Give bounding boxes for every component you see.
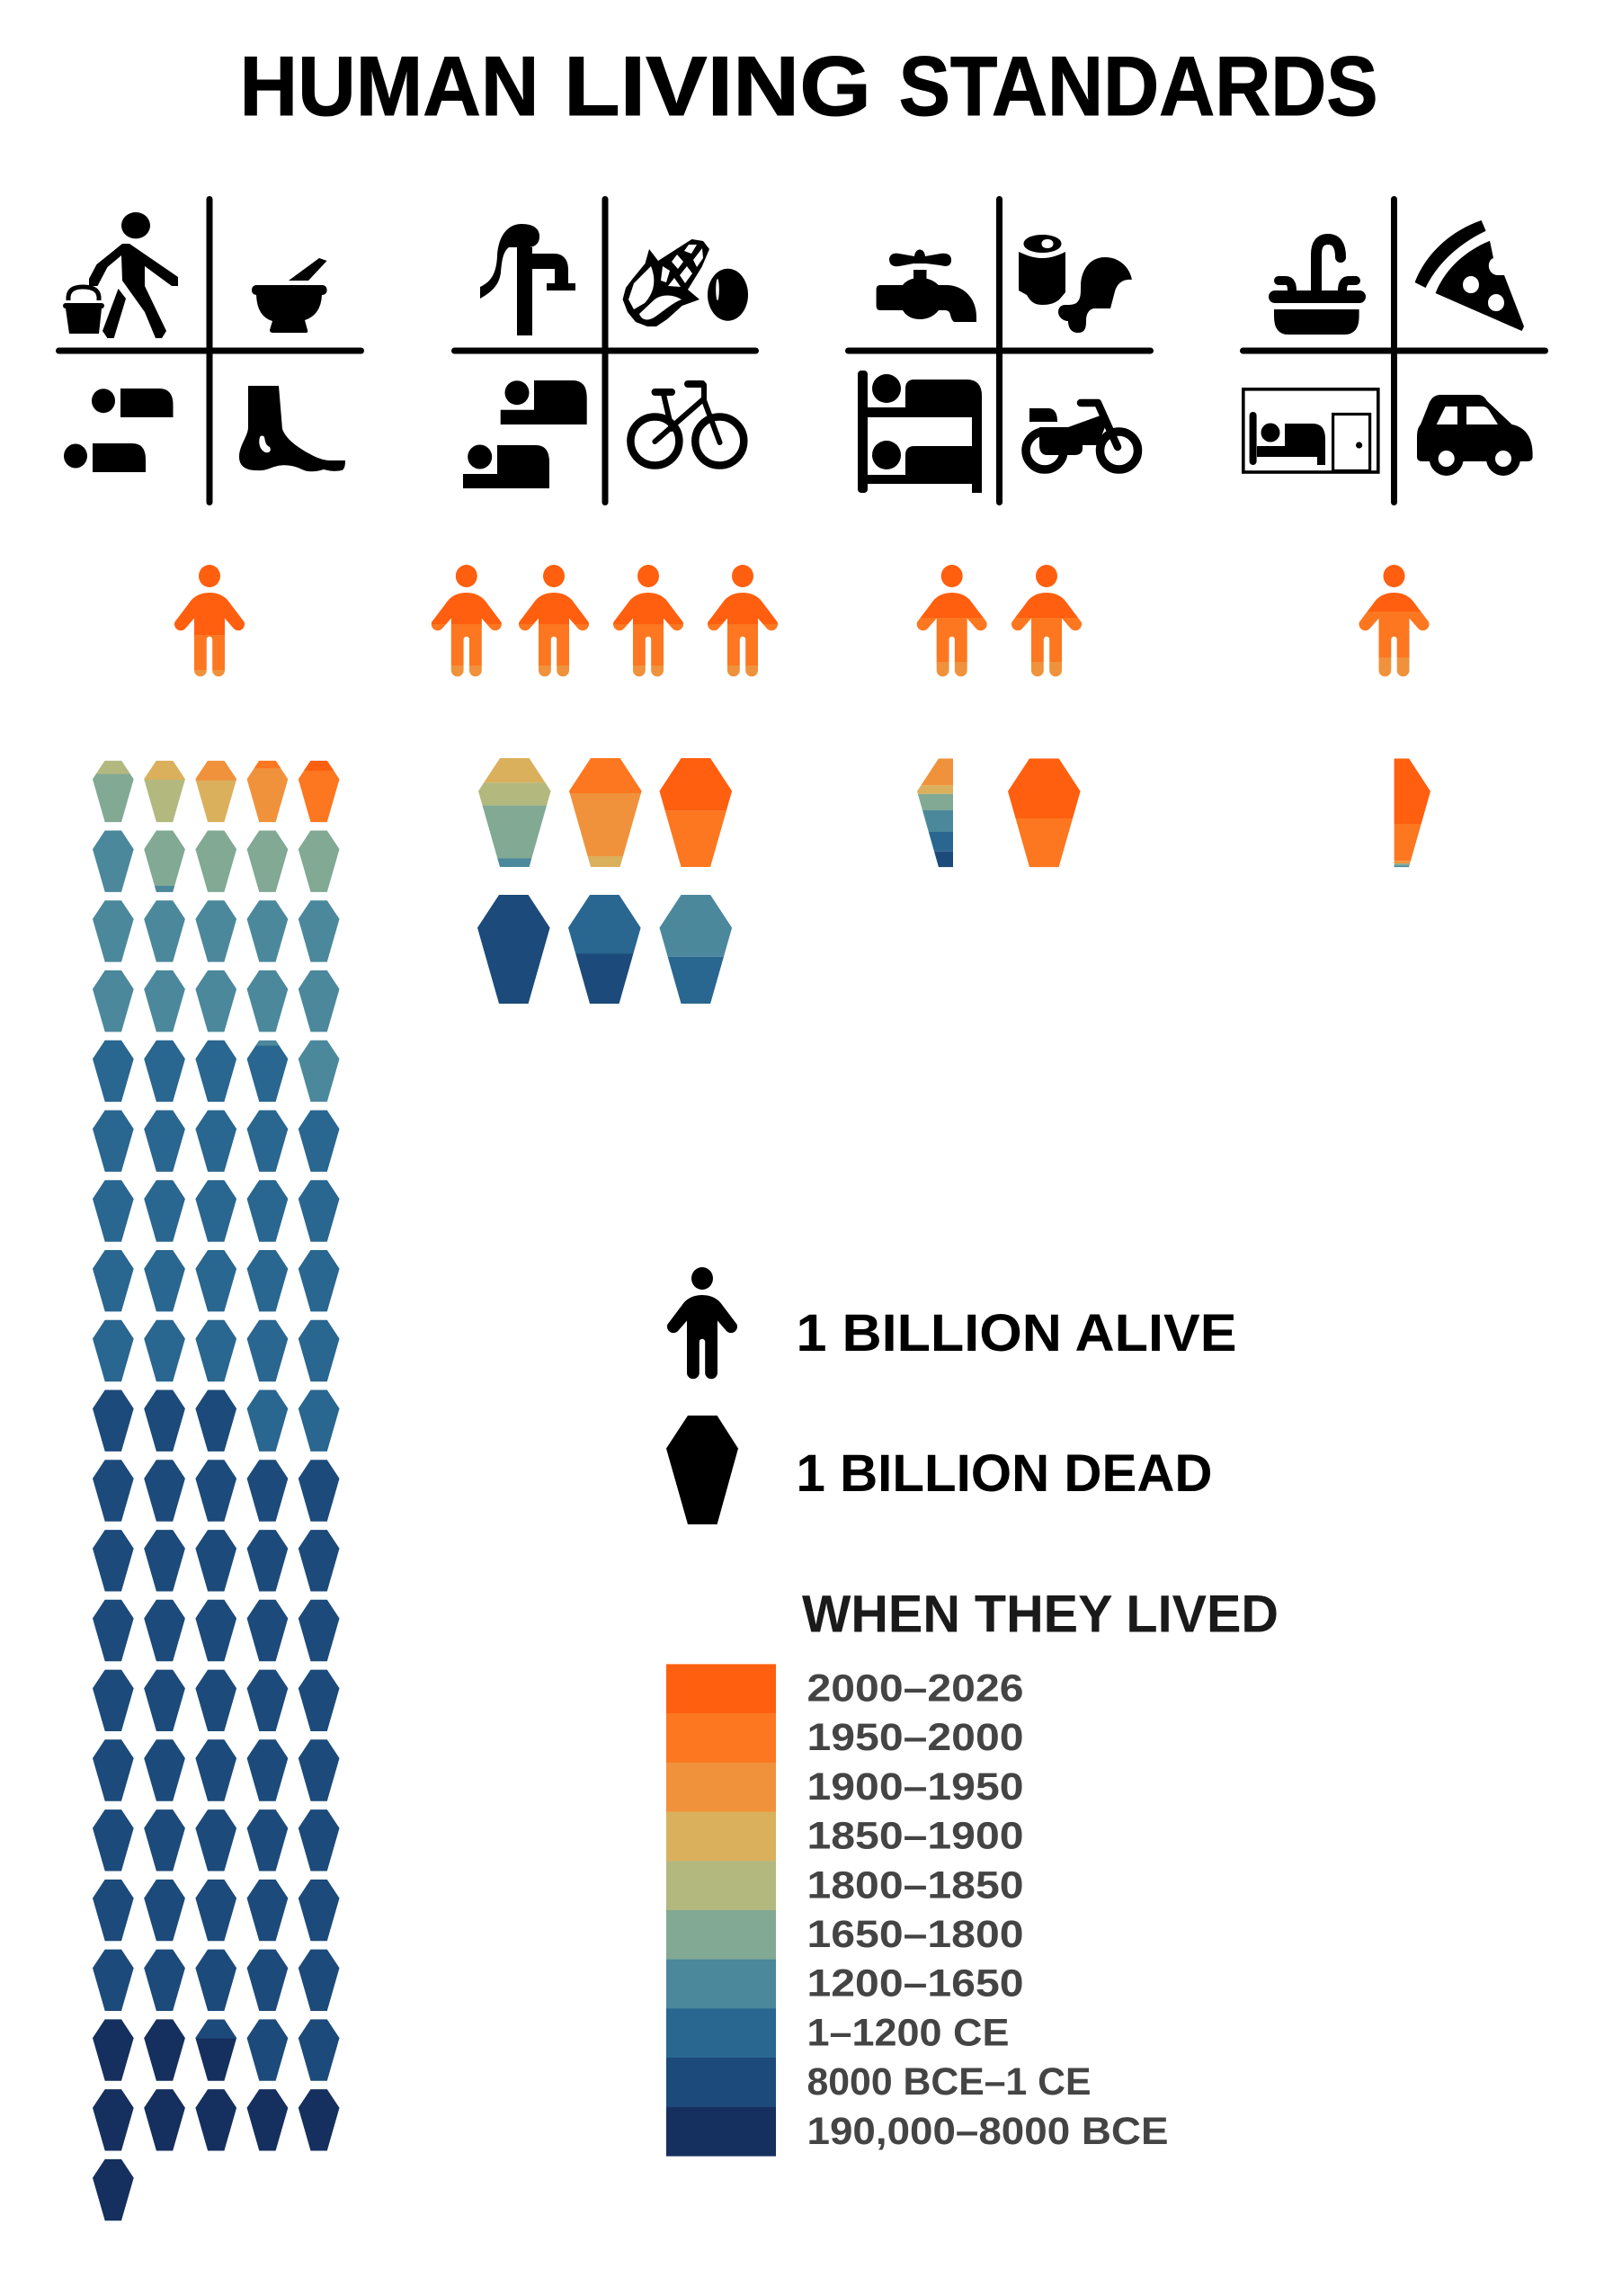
coffin row 16 [93,1809,340,1871]
legend: 1 billion alive [667,1267,1237,1379]
icon: car [1417,395,1533,476]
coffin row 19 [93,2019,340,2081]
title [239,39,1378,133]
coffin row 3 [93,900,340,962]
coffin row 8 [93,1250,340,1311]
coffin row 18 [93,1950,340,2011]
icon: black coffin [666,1416,738,1524]
icon: hand water pump [480,224,575,335]
partial coffin [917,758,953,868]
era labels: 1900–1950 [807,1765,1023,1809]
people alive: group 1 [174,565,245,676]
coffin row 4 [93,970,340,1032]
title: STANDARDS [899,39,1378,133]
icon: corn and egg [623,239,748,326]
icon: pizza slice [1415,220,1524,331]
colour bands [666,1664,776,2157]
legend: 1 billion dead [666,1416,1212,1524]
icon: sink with running tap [1269,239,1366,335]
era labels: 1950–2000 [807,1716,1023,1759]
legend heading: WHEN THEY LIVED [802,1586,1279,1644]
era labels: 1650–1800 [807,1913,1023,1956]
icon: bunk bed with two people [858,371,982,493]
icon: two people sleeping with larger beds [463,380,587,488]
full coffin [1008,758,1081,868]
coffin row 11 [93,1460,340,1522]
title: LIVING [564,39,871,133]
people dead: group 2 coffins [477,758,732,1005]
icon: black person [667,1267,737,1379]
icon: person walking with bucket [63,212,178,338]
era labels [807,1667,1169,2153]
coffin row 1 [93,761,340,823]
label: 1 BILLION ALIVE [797,1304,1237,1362]
coffin row 15 [93,1739,340,1801]
era labels: 2000–2026 [807,1667,1023,1711]
era labels: 1800–1850 [807,1863,1023,1907]
coffin row 7 [93,1180,340,1242]
coffin row 21 [93,2159,134,2220]
coffin row 5 [93,1041,340,1103]
icon: mortar and pestle [252,258,327,333]
people dead: group 3 coffins [917,758,1081,868]
icon: toilet roll and chicken leg [1019,235,1132,333]
era labels: 8000 BCE–1 CE [807,2060,1092,2104]
icon: two people sleeping [64,389,173,472]
title: HUMAN [239,39,539,133]
era labels: 190,000–8000 BCE [807,2110,1169,2153]
people alive: group 3 [912,565,1087,679]
people dead: group 1 coffin grid [93,761,340,2220]
era labels: 1850–1900 [807,1815,1023,1858]
icon: water tap [877,250,976,322]
people dead: group 4 partial coffin [1395,758,1431,868]
era labels: 1–1200 CE [807,2011,1009,2054]
colour scale legend [666,1664,1169,2157]
coffin row 2 [93,831,340,893]
icon: bicycle [630,380,744,466]
icon: bare foot [239,386,345,471]
panel: living standard 1 icons [59,200,361,502]
coffin row 20 [93,2089,340,2151]
icon: motorcycle [1026,403,1138,469]
label: 1 BILLION DEAD [797,1444,1212,1503]
coffin row 14 [93,1670,340,1731]
coffin row 6 [93,1110,340,1172]
coffin row 9 [93,1320,340,1381]
coffin row 13 [93,1600,340,1661]
people alive: group 2 [426,565,783,679]
coffin row 17 [93,1880,340,1941]
icon: private room with bed and door [1243,389,1378,472]
panel: living standard 3 icons [849,200,1151,502]
coffin row 10 [93,1390,340,1452]
panel: living standard 2 icons [455,200,755,502]
people alive: group 4 [1359,565,1430,676]
era labels: 1200–1650 [807,1962,1023,2006]
coffin row 12 [93,1530,340,1592]
panel: living standard 4 icons [1243,200,1545,502]
